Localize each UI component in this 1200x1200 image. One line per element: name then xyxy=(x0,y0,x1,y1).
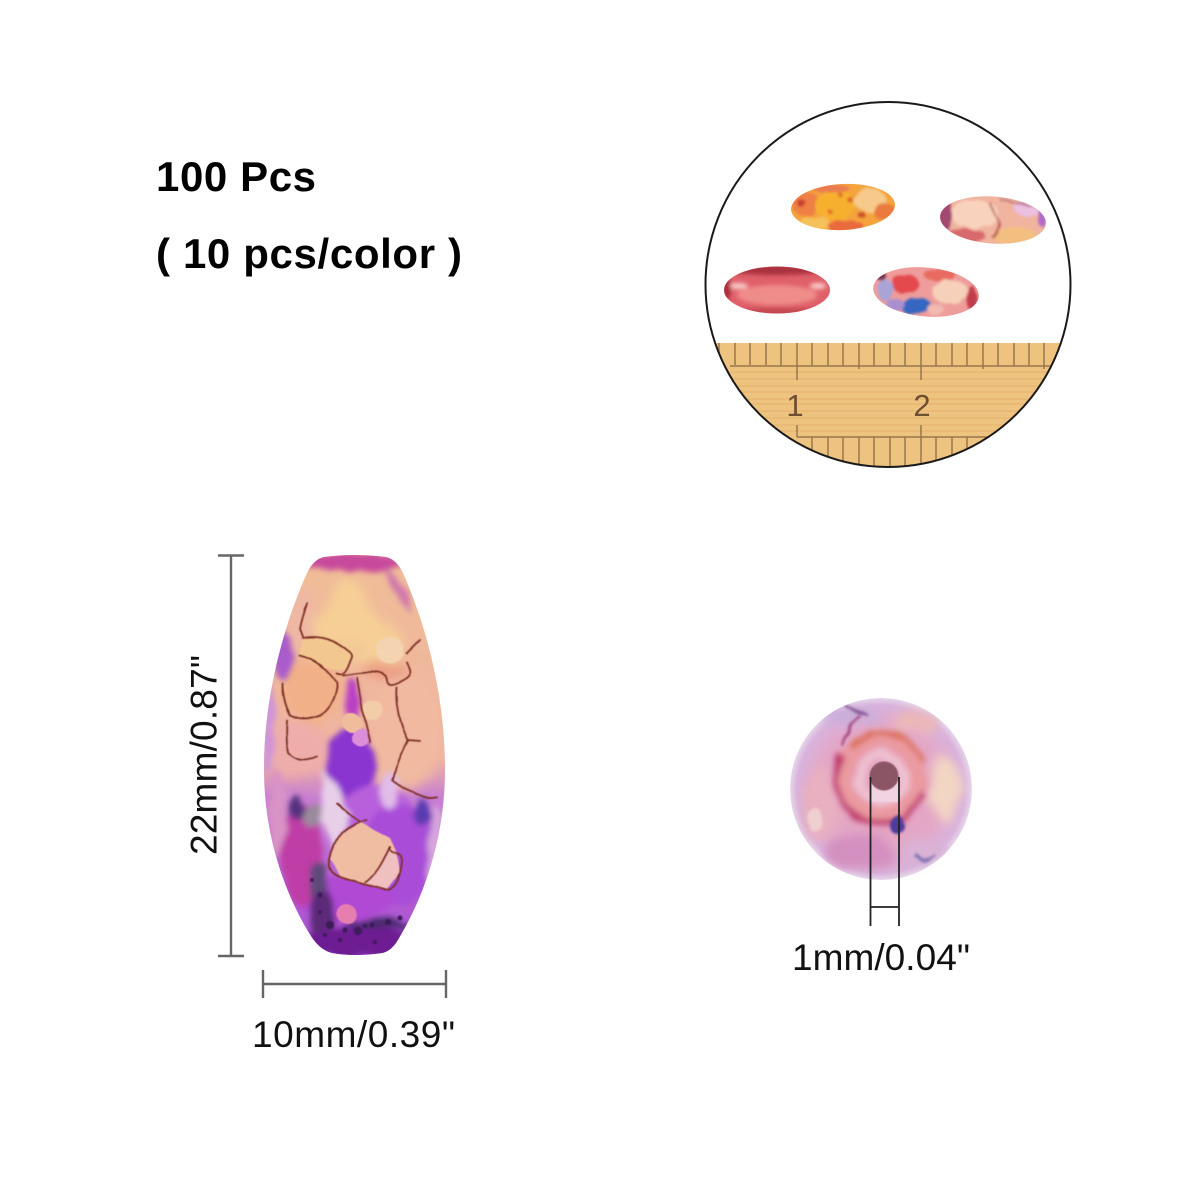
ruler xyxy=(716,343,1060,466)
bead: orange xyxy=(791,184,895,230)
circle outline xyxy=(706,102,1070,467)
dimension: width 10mm line xyxy=(263,970,446,998)
subtitle: 10 pcs per color: ( 10 pcs/color ) xyxy=(156,230,462,277)
title: 100 Pcs: 100 Pcs xyxy=(156,153,316,200)
panel: long bead front view xyxy=(264,555,445,955)
ruler: 1 xyxy=(786,388,804,423)
bottom speckle xyxy=(310,878,402,944)
label: hole 1mm/0.04: 1mm/0.04" xyxy=(792,937,970,978)
dimension: height 22mm line xyxy=(218,556,244,956)
upper paint washes xyxy=(268,575,441,790)
dark veins xyxy=(282,603,437,890)
peach cells xyxy=(300,636,404,924)
bead: mixed blue and pink xyxy=(873,267,979,317)
label: width 10mm/0.39: 10mm/0.39" xyxy=(252,1014,455,1055)
label: height 22mm/0.87: 22mm/0.87" xyxy=(184,655,224,855)
bead: red xyxy=(724,266,830,314)
panel: scale circle with four beads and ruler xyxy=(700,102,1080,473)
panel: round bead end view xyxy=(790,698,972,880)
dimension: hole 1mm lines xyxy=(870,777,899,926)
bead: pink peach xyxy=(940,196,1046,244)
ruler: 2 xyxy=(913,388,931,423)
